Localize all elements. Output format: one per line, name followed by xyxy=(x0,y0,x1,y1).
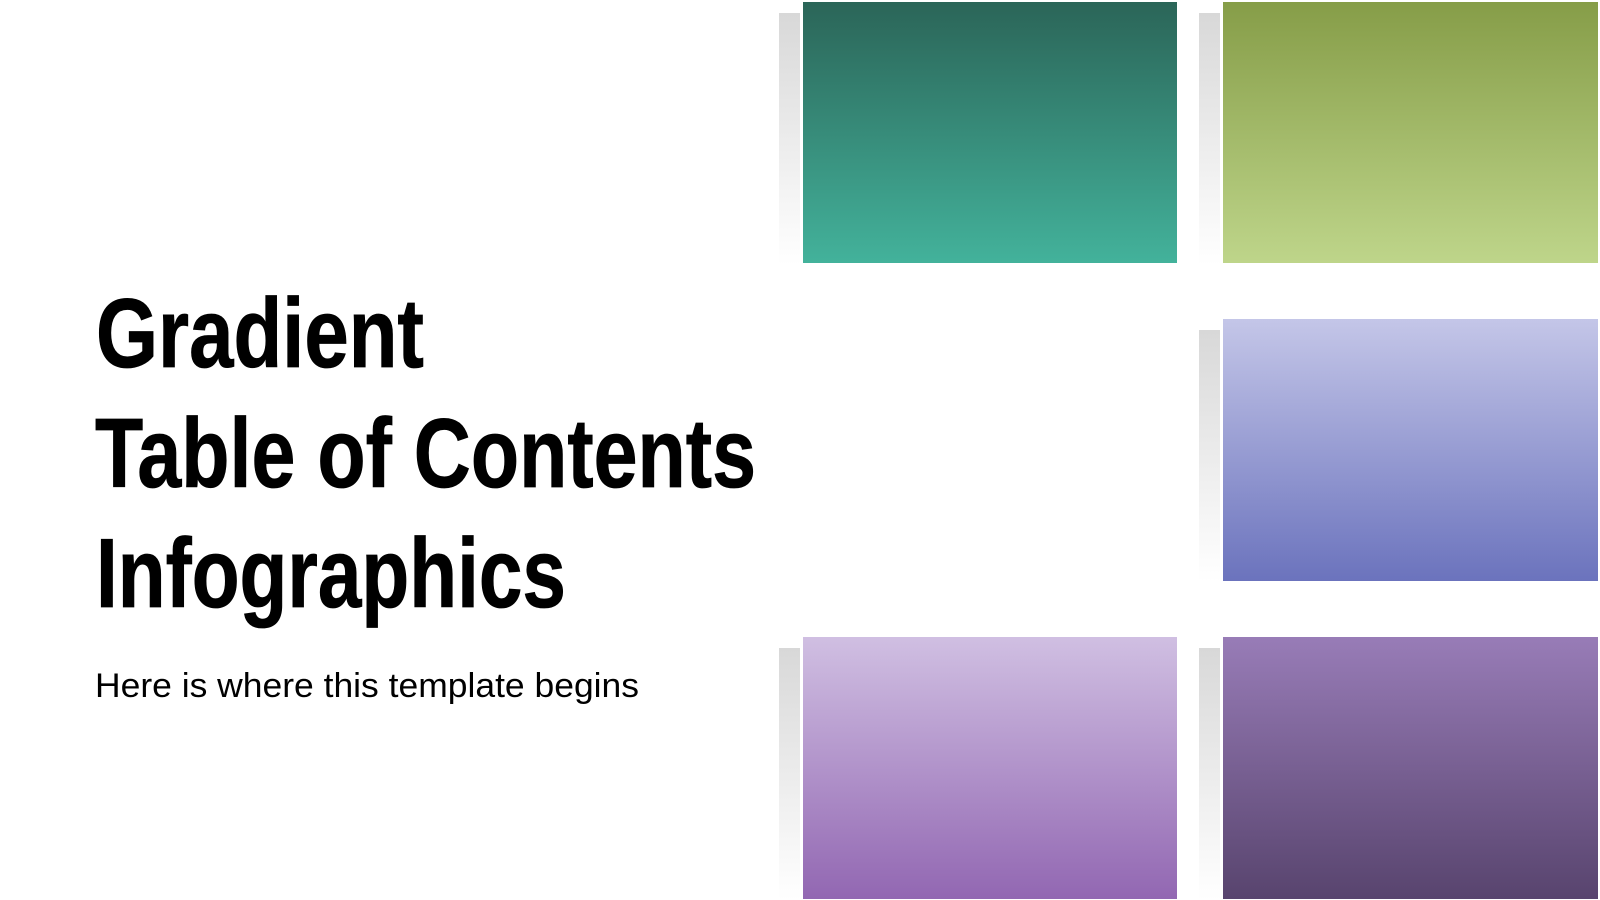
panel shadow strip xyxy=(779,13,800,265)
panel shadow strip xyxy=(1199,648,1220,900)
subtitle: Here is where this template begins xyxy=(95,667,639,705)
panel shadow strip xyxy=(1199,330,1220,582)
panel: olive green section xyxy=(1199,2,1598,263)
title and subtitle text xyxy=(95,278,756,705)
panel: dark purple section xyxy=(1199,637,1598,899)
title: Gradient xyxy=(96,278,424,388)
panel shadow strip xyxy=(779,648,800,900)
panel: periwinkle section xyxy=(1199,319,1598,581)
panel: lilac section xyxy=(779,637,1177,899)
panel: green-teal section xyxy=(779,2,1177,263)
dark purple gradient card xyxy=(1223,637,1598,899)
panel shadow strip xyxy=(1199,13,1220,265)
lilac gradient card xyxy=(803,637,1177,899)
teal gradient card xyxy=(803,2,1177,263)
olive gradient card xyxy=(1223,2,1598,263)
title: Infographics xyxy=(96,518,566,628)
periwinkle gradient card xyxy=(1223,319,1598,581)
title xyxy=(95,278,756,628)
